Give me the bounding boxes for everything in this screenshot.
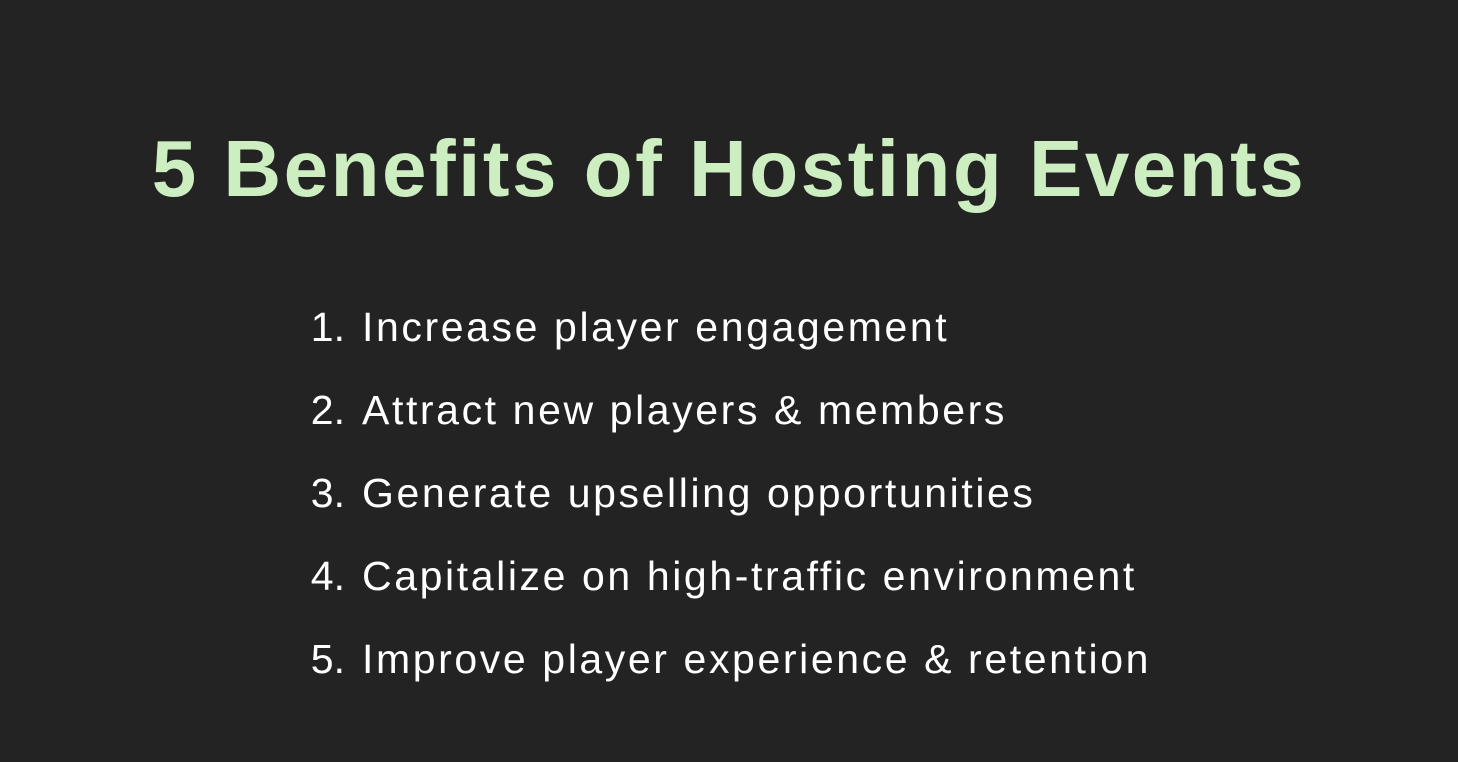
item 3: 3.: [311, 470, 345, 516]
item 3: Generate upselling opportunities: [362, 470, 1036, 516]
item 1: 1.: [311, 304, 345, 350]
title: 5 Benefits of Hosting Events: [152, 124, 1306, 213]
item 1: Increase player engagement: [362, 304, 949, 350]
benefits list: [311, 304, 1151, 682]
item 4: Capitalize on high-traffic environment: [362, 553, 1137, 599]
item 2: Attract new players & members: [362, 387, 1007, 433]
item 5: Improve player experience & retention: [362, 636, 1151, 682]
item 5: 5.: [311, 636, 345, 682]
item 4: 4.: [311, 553, 345, 599]
item 2: 2.: [311, 387, 345, 433]
